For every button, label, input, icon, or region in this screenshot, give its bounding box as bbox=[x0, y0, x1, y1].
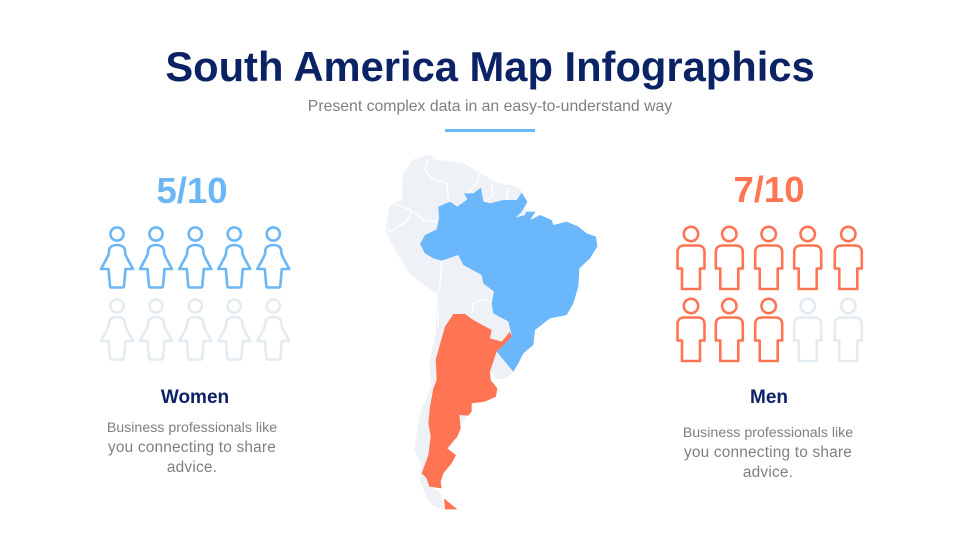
women description: you connecting to share bbox=[108, 439, 276, 456]
title: South America Map Infographics bbox=[165, 43, 815, 90]
men label: Men bbox=[750, 387, 788, 408]
women description: Business professionals like bbox=[107, 420, 277, 436]
men description: you connecting to share bbox=[684, 444, 852, 461]
women pictogram bbox=[100, 226, 291, 361]
men score: 7/10 bbox=[733, 169, 805, 210]
men description: advice. bbox=[743, 464, 793, 481]
men description bbox=[683, 425, 853, 481]
women description: advice. bbox=[167, 459, 217, 476]
women description bbox=[107, 420, 277, 476]
Tierra del Fuego in orange bbox=[444, 498, 457, 509]
men pictogram bbox=[676, 226, 864, 362]
men description: Business professionals like bbox=[683, 425, 853, 441]
subtitle: Present complex data in an easy-to-understand way bbox=[308, 98, 672, 115]
Argentina highlighted in orange bbox=[422, 314, 512, 488]
Brazil highlighted in blue bbox=[420, 188, 597, 372]
grey countries of the continent bbox=[386, 155, 527, 510]
women label: Women bbox=[161, 387, 229, 408]
panel: men bbox=[676, 169, 864, 481]
panel: women bbox=[100, 170, 291, 476]
women score: 5/10 bbox=[156, 170, 228, 211]
title underline accent bbox=[445, 129, 535, 132]
